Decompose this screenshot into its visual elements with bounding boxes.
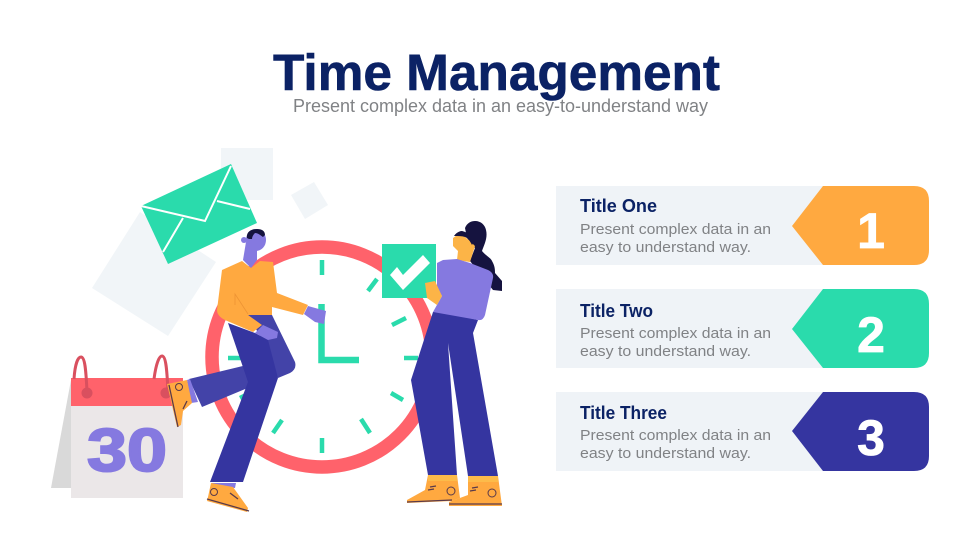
description 1: Present complex data in an [580, 221, 771, 238]
panel: item one [556, 186, 929, 265]
panel: item two: 2 [857, 307, 885, 363]
heading 1: Title One [580, 196, 657, 216]
clock ticks [228, 260, 418, 453]
tag 3 [792, 392, 929, 471]
description 3: Present complex data in an [580, 427, 771, 444]
icon: envelope [141, 164, 257, 264]
panel: item three [556, 392, 929, 471]
sweater [433, 259, 493, 320]
panel: item one: 1 [857, 203, 885, 259]
face [453, 233, 475, 262]
heading 3: Title Three [580, 403, 667, 423]
figure: man [167, 229, 326, 512]
title: Time Management [273, 44, 720, 101]
standing leg [210, 323, 278, 482]
calendar date: 30 [87, 417, 167, 484]
lower foot [212, 483, 236, 488]
panel: item three: 3 [857, 410, 885, 466]
background squares [92, 148, 328, 336]
description 3: easy to understand way. [580, 445, 751, 462]
shoes [407, 475, 460, 503]
figure: woman [407, 221, 502, 506]
sweater [217, 261, 308, 332]
panel: item two [556, 289, 929, 368]
thigh [248, 315, 295, 378]
clock [212, 247, 432, 467]
neck and head [243, 242, 257, 268]
pants [411, 312, 498, 476]
woman's hand [425, 281, 442, 305]
description 2: Present complex data in an [580, 325, 771, 342]
tag 2 [792, 289, 929, 368]
raised leg [189, 365, 250, 407]
icon: check box [382, 244, 436, 298]
hands [255, 325, 278, 340]
clock hands [322, 304, 359, 360]
tag 1 [792, 186, 929, 265]
description 2: easy to understand way. [580, 343, 751, 360]
subtitle: Present complex data in an easy-to-understand way [293, 96, 708, 116]
description 1: easy to understand way. [580, 239, 751, 256]
heading 2: Title Two [580, 301, 653, 321]
icon: calendar [51, 356, 183, 498]
hair [465, 221, 502, 291]
